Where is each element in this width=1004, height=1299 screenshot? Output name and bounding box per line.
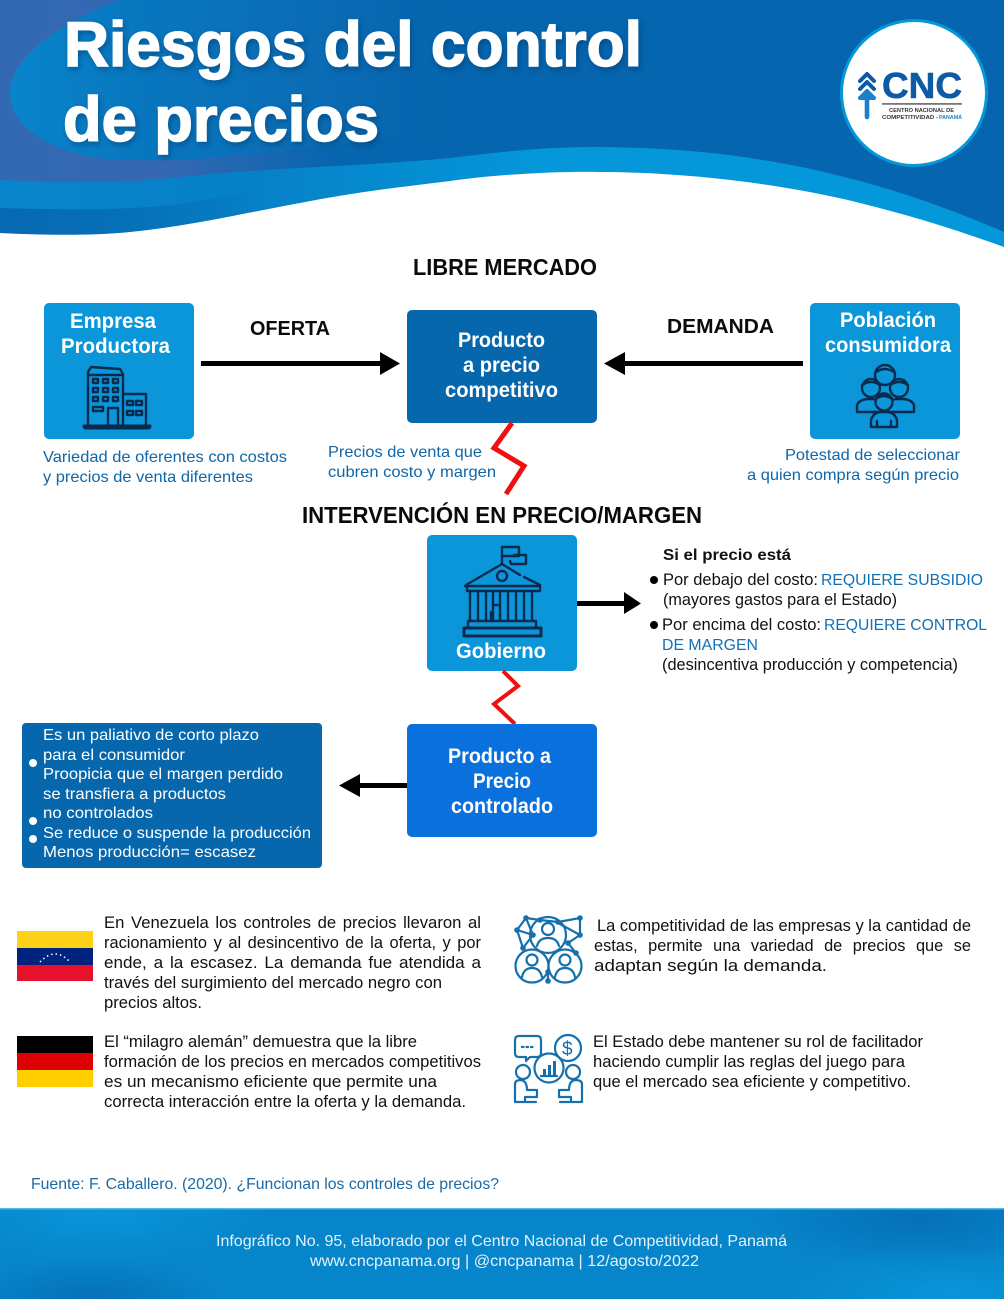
text: alemania: [104, 1033, 481, 1111]
text block: si el precio está: REQUIERE SUBSIDIO: [821, 572, 983, 589]
heading: intervención: INTERVENCIÓN EN PRECIO/MARGEN: [302, 501, 702, 528]
footer band: www.cncpanama.org | @cncpanama | 12/agosto/2022: [309, 1253, 699, 1270]
text: competitividad: estas, permite una variedad de precios que se: [594, 937, 971, 955]
icon: buildings: [84, 367, 150, 428]
text: venezuela: ende, a la escasez. La demanda fue atendida a: [104, 954, 482, 972]
panel: efectos: Proopicia que el margen perdido: [43, 766, 283, 783]
text: venezuela: través del surgimiento del mercado negro con: [104, 974, 442, 992]
panel: producto a precio competitivo: competitivo: [445, 379, 558, 402]
panel: empresa productora: Productora: [61, 335, 170, 358]
icon: red zigzag top: [494, 423, 524, 494]
text: precios de venta: cubren costo y margen: [328, 464, 496, 481]
text block: si el precio está: Por debajo del costo:: [663, 571, 818, 589]
icon: meeting with chart: [515, 1035, 582, 1102]
text: estado: que el mercado sea eficiente y competitivo.: [593, 1073, 911, 1091]
title: de precios: [63, 85, 379, 155]
text: variedad de oferentes: [43, 449, 287, 486]
logo: CNC: COMPETITIVIDAD -: [882, 115, 938, 121]
text: estado: haciendo cumplir las reglas del juego para: [593, 1053, 906, 1071]
text: potestad de seleccionar: [747, 447, 961, 484]
text: variedad de oferentes: y precios de venta diferentes: [43, 469, 253, 486]
text block: si el precio está: (desincentiva producción y competencia): [662, 656, 958, 674]
label: oferta: OFERTA: [250, 318, 330, 340]
text: venezuela: En Venezuela los controles de precios llevaron al: [104, 914, 481, 932]
text block: si el precio está: Si el precio está: [663, 547, 791, 564]
arrow: demanda: [604, 352, 803, 375]
icon: flag venezuela: [17, 931, 93, 981]
panel: gobierno: Gobierno: [456, 640, 546, 663]
panel: empresa productora: [44, 303, 194, 439]
text: potestad de seleccionar: Potestad de seleccionar: [785, 447, 961, 464]
text: alemania: formación de los precios en mercados competitivos: [104, 1053, 481, 1071]
panel: efectos: no controlados: [43, 805, 153, 822]
text: competitividad: [594, 917, 971, 975]
text block: si el precio está: (mayores gastos para el Estado): [663, 591, 897, 609]
title: [63, 10, 642, 155]
arrow: gobierno to notes: [577, 592, 641, 614]
panel: producto a precio controlado: Precio: [473, 770, 531, 793]
panel: población consumidora: [810, 303, 960, 439]
icon: red zigzag bottom: [494, 671, 518, 724]
text: venezuela: [104, 914, 482, 1012]
icon: meeting with chart: $: [562, 1039, 573, 1060]
icon: flag germany: [17, 1036, 93, 1087]
panel: efectos: [22, 723, 322, 868]
text: venezuela: racionamiento y al desincentivo de la oferta, y por: [104, 934, 482, 952]
logo: CNC: PANAMÁ: [939, 114, 962, 121]
header banner: [0, 0, 1004, 270]
panel: producto a precio controlado: [407, 724, 597, 837]
footer band: [0, 1163, 1004, 1299]
text: precios de venta: [328, 444, 496, 481]
text: alemania: El “milagro alemán” demuestra que la libre: [104, 1033, 417, 1051]
text: venezuela: precios altos.: [104, 994, 202, 1012]
text: estado: El Estado debe mantener su rol de facilitador: [593, 1033, 924, 1051]
panel: producto a precio competitivo: a precio: [463, 354, 540, 377]
text block: si el precio está: Por encima del costo:: [662, 616, 821, 634]
panel: gobierno: [427, 535, 577, 671]
logo: CNC: [842, 20, 986, 166]
logo: CNC: CNC: [882, 65, 962, 106]
text: alemania: es un mecanismo eficiente que permite una: [104, 1073, 438, 1091]
text block: si el precio está: REQUIERE CONTROL: [824, 617, 987, 634]
text: variedad de oferentes: Variedad de oferentes con costos: [43, 449, 287, 466]
panel: población consumidora: consumidora: [825, 334, 951, 357]
logo: CNC: CENTRO NACIONAL DE: [889, 108, 954, 114]
icon: logo arrows: [860, 74, 874, 117]
label: demanda: DEMANDA: [667, 316, 774, 338]
text block: si el precio está: DE MARGEN: [662, 637, 758, 654]
panel: producto a precio competitivo: Producto: [458, 329, 545, 352]
panel: efectos: se transfiera a productos: [43, 786, 226, 803]
panel: producto a precio controlado: controlado: [451, 795, 553, 818]
footer band: Infográfico No. 95, elaborado por el Centro Nacional de Competitividad, Panamá: [216, 1233, 787, 1250]
icon: network of people: [514, 915, 583, 984]
panel: efectos: Es un paliativo de corto plazo: [43, 727, 259, 744]
panel: efectos: Se reduce o suspende la producción: [43, 825, 311, 842]
panel: población consumidora: Población: [840, 309, 936, 332]
panel: producto a precio competitivo: [407, 310, 597, 423]
icon: government building: [464, 547, 541, 636]
text: alemania: correcta interacción entre la oferta y la demanda.: [104, 1093, 466, 1111]
text: competitividad: La competitividad de las empresas y la cantidad de: [597, 917, 971, 935]
text: potestad de seleccionar: a quien compra según precio: [747, 467, 959, 484]
heading: libre mercado: LIBRE MERCADO: [413, 254, 597, 280]
text block: si el precio está: [650, 547, 987, 674]
icon: people: [857, 365, 914, 427]
panel: empresa productora: Empresa: [70, 310, 156, 333]
panel: producto a precio controlado: Producto a: [448, 745, 551, 768]
arrow: oferta: [201, 352, 400, 375]
panel: efectos: para el consumidor: [43, 747, 186, 764]
title: Riesgos del control: [64, 10, 642, 80]
text: competitividad: adaptan según la demanda.: [594, 957, 827, 975]
panel: efectos: Menos producción= escasez: [43, 844, 256, 861]
arrow: controlado to effects: [339, 774, 407, 797]
text: fuente: Fuente: F. Caballero. (2020). ¿Funcionan los controles de precios?: [31, 1176, 499, 1193]
text: estado: [593, 1033, 924, 1091]
text: precios de venta: Precios de venta que: [328, 444, 482, 461]
